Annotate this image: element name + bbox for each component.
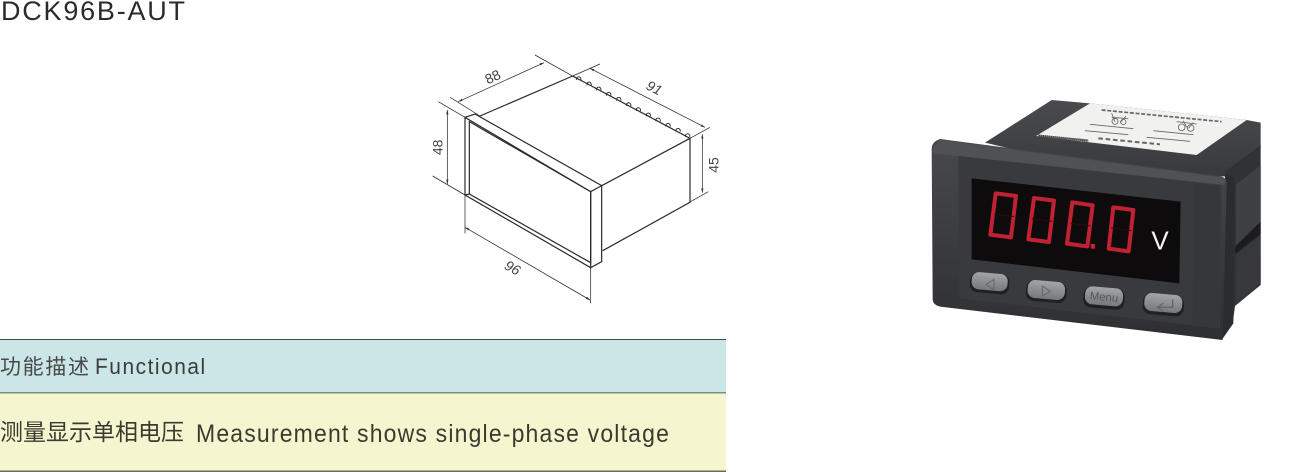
dimension 91: 91 bbox=[644, 77, 665, 98]
table header band bbox=[0, 339, 726, 394]
button left bbox=[969, 271, 1010, 295]
meter top surface bbox=[985, 100, 1261, 177]
product label bbox=[1036, 103, 1247, 155]
table row bbox=[0, 394, 726, 472]
button Menu: Menu bbox=[1089, 290, 1119, 305]
red LED reading 000.0 bbox=[990, 193, 1133, 251]
button Menu bbox=[1082, 286, 1125, 310]
meter front bezel bbox=[932, 139, 1227, 340]
dimension 45 bbox=[689, 134, 721, 202]
table header band: 功能描述 bbox=[0, 356, 89, 379]
dimension 88: 88 bbox=[482, 66, 503, 87]
button enter bbox=[1142, 292, 1185, 317]
unit V: V bbox=[1151, 225, 1169, 255]
drawing: enclosure body bbox=[465, 76, 690, 268]
dimension 88 bbox=[450, 55, 577, 116]
dimension 45: 45 bbox=[705, 157, 721, 173]
table: functional bbox=[0, 339, 726, 472]
table row: 测量显示单相电压 bbox=[0, 419, 184, 445]
meter right side bbox=[1222, 145, 1261, 340]
table header band: Functional bbox=[95, 355, 205, 379]
button right bbox=[1025, 279, 1067, 304]
display window bbox=[972, 178, 1181, 283]
dimension 48 bbox=[429, 102, 465, 195]
dimension 48: 48 bbox=[429, 139, 445, 155]
product photo: digital voltmeter bbox=[932, 100, 1261, 340]
dimension 96 bbox=[465, 195, 591, 303]
dimension 91 bbox=[573, 64, 710, 138]
dimension 96: 96 bbox=[502, 257, 523, 278]
table row: Measurement shows single-phase voltage bbox=[196, 420, 669, 448]
drawing: rear terminals bbox=[577, 77, 690, 137]
dimension drawing bbox=[429, 55, 721, 303]
